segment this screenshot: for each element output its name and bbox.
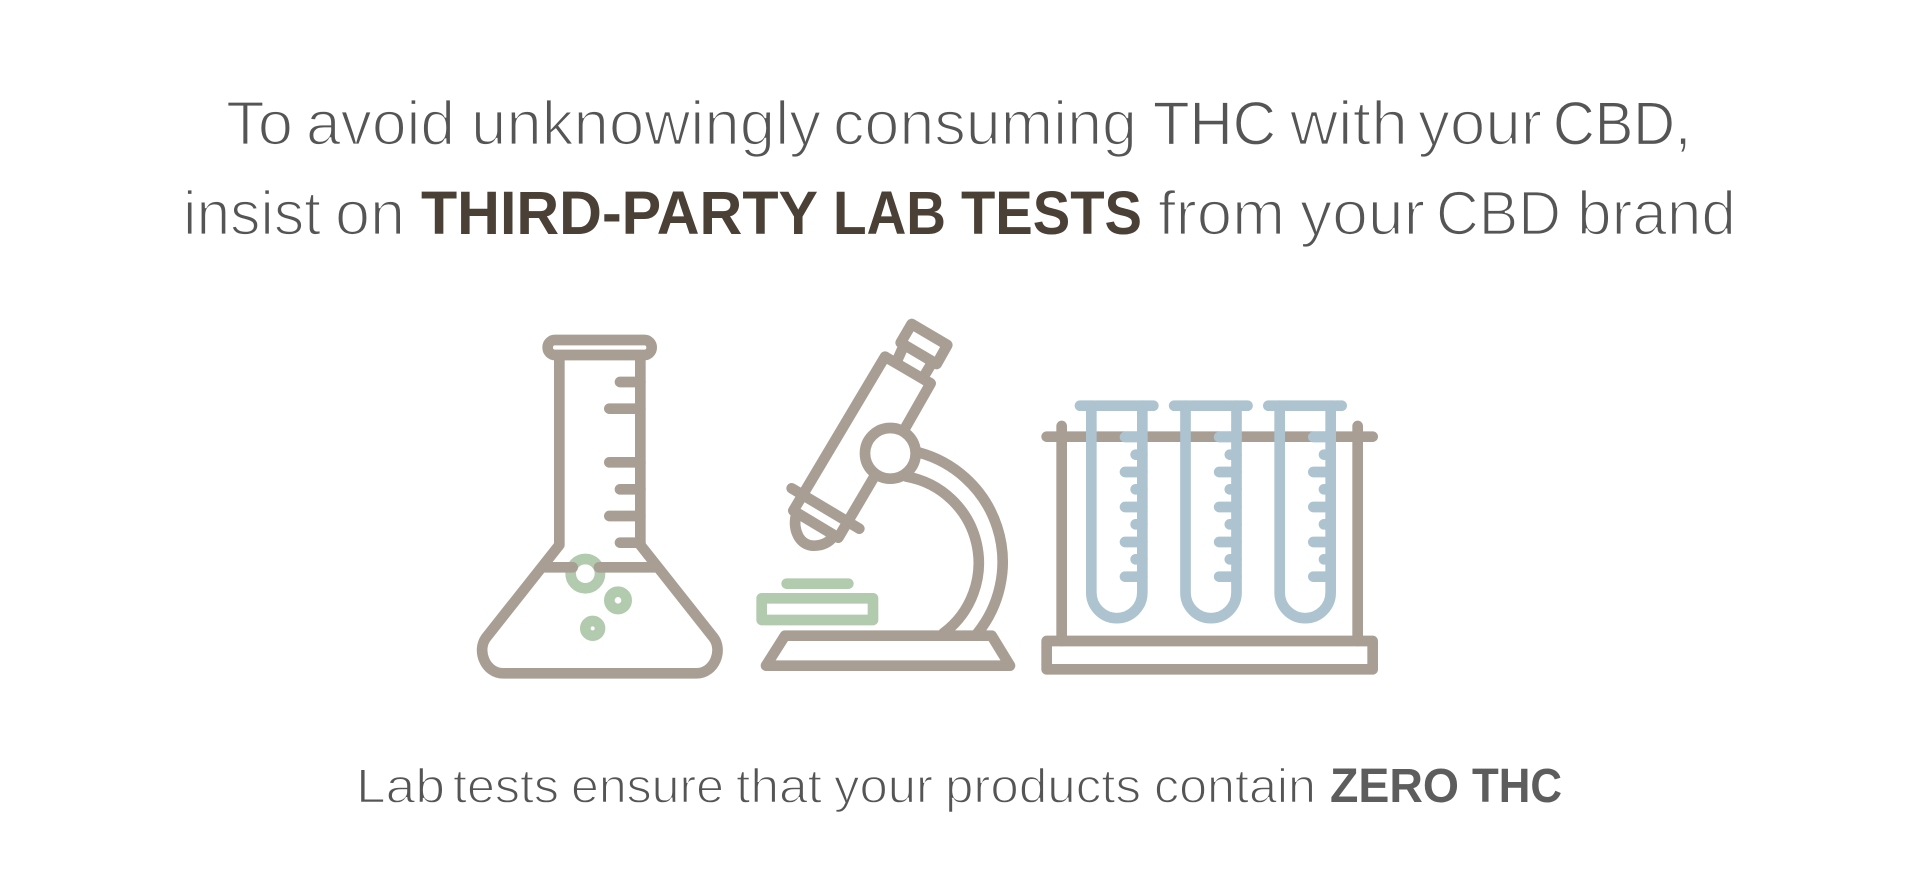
caption: zero THC statement: your bbox=[834, 760, 933, 814]
title: heading with two lines bbox=[183, 90, 1736, 248]
icon: flask bbox=[482, 340, 718, 673]
title: heading with two lines: avoid bbox=[306, 90, 455, 158]
microscope body bbox=[766, 324, 1010, 666]
caption: zero THC statement: products bbox=[945, 760, 1141, 814]
title: heading with two lines: CBD, bbox=[1553, 90, 1691, 158]
test tube 2 bbox=[1174, 406, 1247, 618]
caption: zero THC statement: ensure bbox=[571, 760, 724, 814]
test tube 3 bbox=[1268, 406, 1342, 618]
microscope slide bbox=[762, 584, 873, 620]
icon: test tube rack bbox=[1047, 406, 1373, 669]
title: heading with two lines: TESTS bbox=[961, 179, 1142, 247]
test tube 1 bbox=[1080, 406, 1153, 618]
caption: zero THC statement: THC bbox=[1472, 760, 1562, 813]
rack bbox=[1047, 426, 1373, 669]
title: heading with two lines: THC bbox=[1153, 90, 1276, 158]
flask bubbles bbox=[571, 559, 627, 636]
flask outline bbox=[482, 340, 718, 673]
caption: zero THC statement: that bbox=[736, 760, 822, 814]
title: heading with two lines: LAB bbox=[833, 179, 946, 247]
icon: microscope bbox=[762, 324, 1010, 666]
caption: zero THC statement bbox=[356, 760, 1562, 814]
title: heading with two lines: CBD bbox=[1436, 180, 1561, 248]
caption: zero THC statement: contain bbox=[1154, 760, 1316, 814]
title: heading with two lines: from bbox=[1158, 180, 1285, 248]
title: heading with two lines: insist bbox=[183, 180, 321, 248]
title: heading with two lines: consuming bbox=[833, 90, 1137, 158]
caption: zero THC statement: tests bbox=[453, 760, 559, 814]
title: heading with two lines: with bbox=[1289, 90, 1408, 158]
caption: zero THC statement: Lab bbox=[356, 760, 445, 814]
title: heading with two lines: THIRD-PARTY bbox=[421, 179, 818, 247]
title: heading with two lines: your bbox=[1300, 180, 1425, 248]
title: heading with two lines: brand bbox=[1577, 180, 1736, 248]
title: heading with two lines: your bbox=[1418, 90, 1542, 158]
caption: zero THC statement: ZERO bbox=[1330, 760, 1459, 813]
title: heading with two lines: To bbox=[226, 90, 293, 158]
title: heading with two lines: on bbox=[335, 180, 405, 248]
title: heading with two lines: unknowingly bbox=[471, 90, 821, 158]
